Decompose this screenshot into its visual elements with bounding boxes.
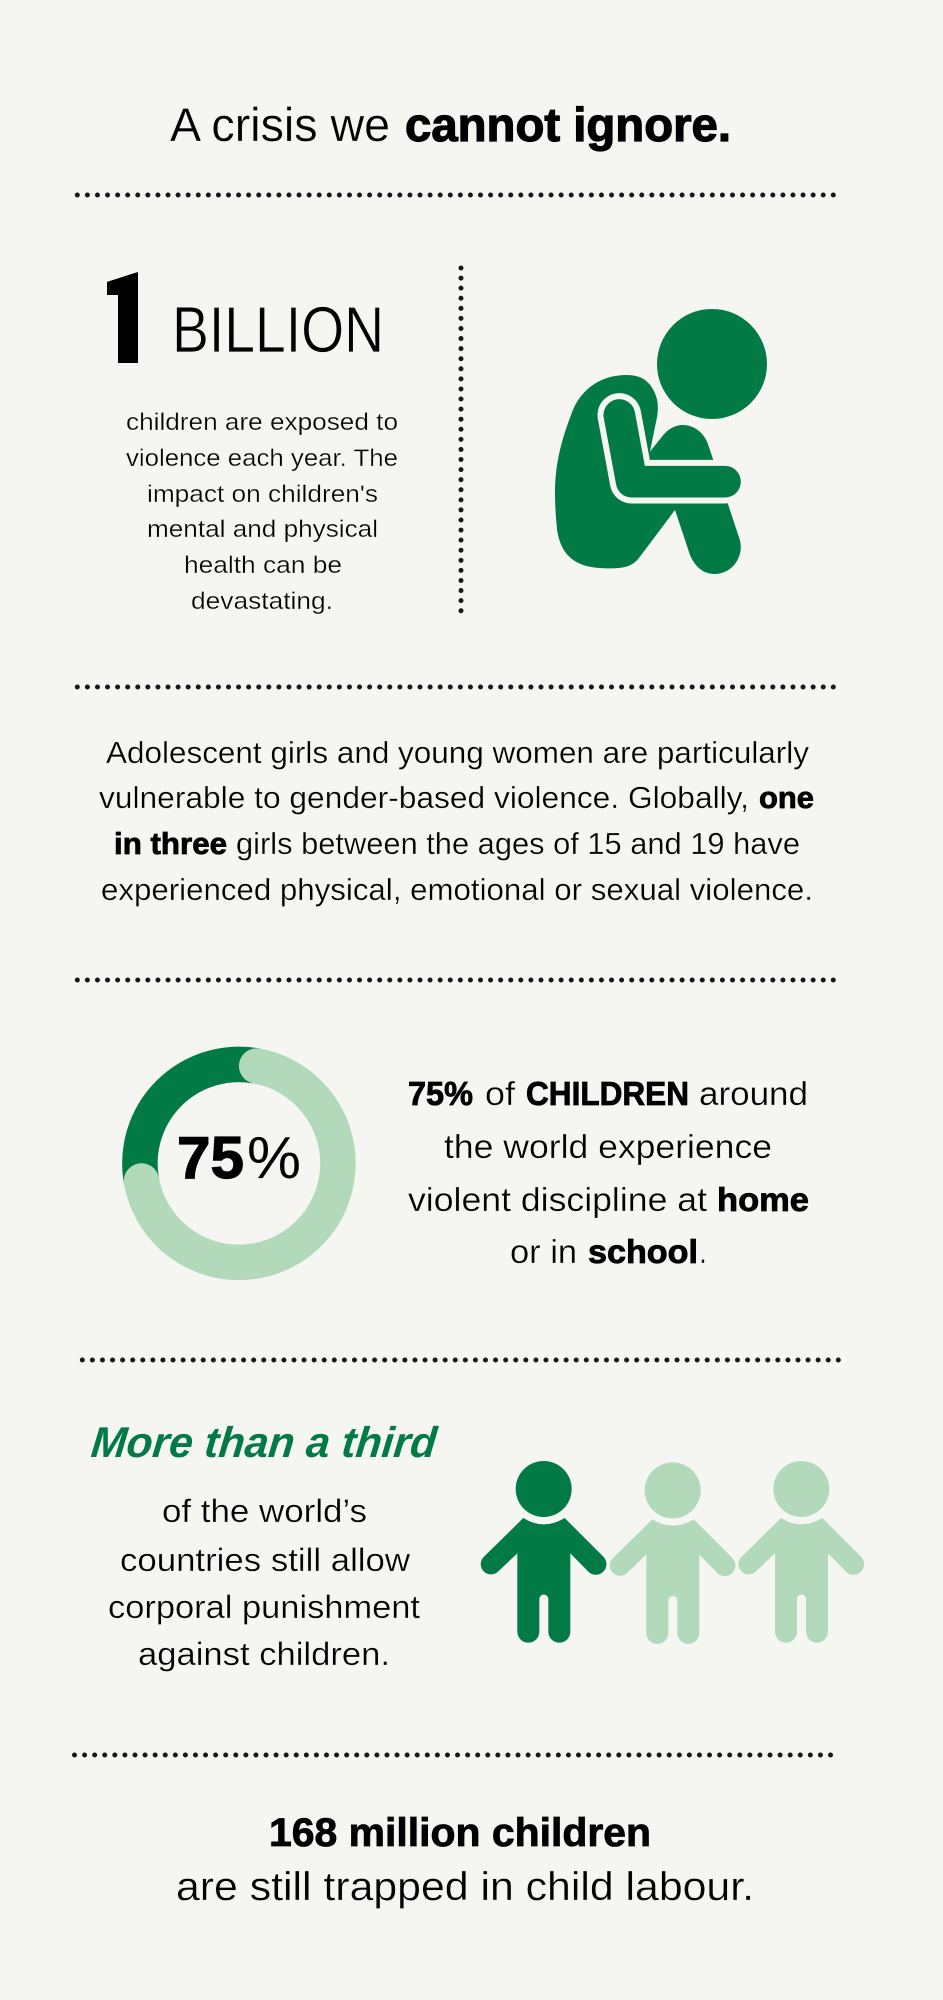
text block: violent discipline: 75% <box>408 1075 473 1112</box>
text block: violent discipline: school <box>588 1233 698 1270</box>
donut value: 75 <box>177 1125 244 1191</box>
text block: child labour: are still trapped in child labour. <box>176 1865 754 1909</box>
text block: violent discipline <box>408 1075 809 1270</box>
text block: corporal punishment: countries still allow <box>120 1542 411 1578</box>
donut value <box>177 1125 301 1191</box>
text block: corporal punishment <box>108 1493 420 1672</box>
text block: adolescent girls: Adolescent girls and young women are particularly <box>106 735 810 770</box>
text block: exposure to violence: violence each year. The <box>126 445 398 472</box>
heading: billion: BILLION <box>172 293 384 366</box>
text block: violent discipline: of <box>485 1075 516 1112</box>
text block: violent discipline: or in <box>510 1233 577 1270</box>
text block: adolescent girls <box>99 735 814 907</box>
text block: corporal punishment: against children. <box>138 1636 390 1672</box>
donut value: % <box>247 1125 301 1191</box>
text block: exposure to violence: mental and physical <box>147 516 378 543</box>
chart: 75 percent donut <box>140 1064 338 1262</box>
title: cannot ignore. <box>405 98 731 151</box>
text block: violent discipline: CHILDREN <box>526 1075 689 1112</box>
heading: more than a third: More than a third <box>89 1419 441 1467</box>
text block: adolescent girls: girls between the ages of 15 and 19 have <box>236 826 800 861</box>
text block: violent discipline: around <box>699 1075 808 1112</box>
text block: corporal punishment: corporal punishment <box>108 1589 420 1625</box>
title <box>170 98 731 151</box>
text block: exposure to violence: devastating. <box>191 588 333 615</box>
icon: seated child hugging knees <box>555 309 767 574</box>
text block: adolescent girls: experienced physical, emotional or sexual violence. <box>101 872 813 907</box>
text block: exposure to violence <box>126 409 398 615</box>
text block: violent discipline: violent discipline at <box>408 1181 707 1218</box>
panel: one billion <box>107 272 397 614</box>
text block: violent discipline: home <box>717 1181 809 1218</box>
text block: violent discipline: . <box>699 1233 707 1270</box>
text block: exposure to violence: impact on children's <box>147 481 378 508</box>
title: A crisis we <box>170 98 390 151</box>
text block: exposure to violence: children are exposed to <box>126 409 398 436</box>
text block: child labour: 168 million children <box>269 1811 651 1855</box>
text block: corporal punishment: of the world’s <box>162 1493 367 1529</box>
text block: exposure to violence: health can be <box>184 552 342 579</box>
text block: adolescent girls: in three <box>114 826 227 861</box>
text block: violent discipline: the world experience <box>444 1128 772 1165</box>
text block: adolescent girls: one <box>759 780 814 815</box>
big number 1: 1 <box>84 241 162 398</box>
text block: adolescent girls: vulnerable to gender-based violence. Globally, <box>99 780 749 815</box>
icon: three children <box>481 1461 864 1644</box>
text block: child labour <box>176 1811 754 1909</box>
